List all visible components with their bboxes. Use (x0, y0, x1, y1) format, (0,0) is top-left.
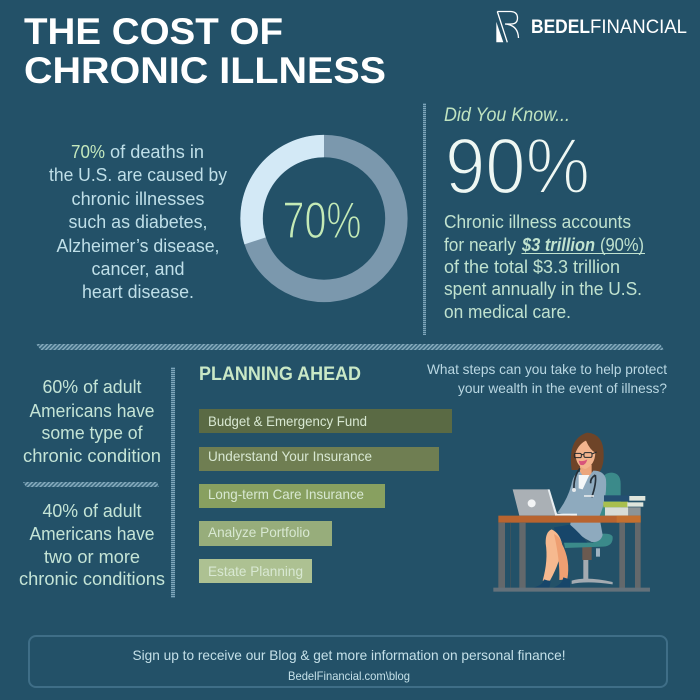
stat: 40% of adults: two or more (44, 547, 140, 567)
title (24, 11, 386, 91)
text block: 70% of deaths: chronic illnesses (72, 189, 204, 209)
heading: did you know: Did You Know... (444, 105, 570, 126)
stat: 60% of adults: some type of (42, 423, 143, 443)
vertical divider: bottom (171, 367, 175, 598)
bar: budget (199, 409, 452, 433)
text block: 70% of deaths (49, 142, 227, 302)
text block: 70% of deaths: Alzheimer’s disease, (56, 236, 220, 256)
big number: 90%: 90% (445, 121, 590, 210)
stat: 40% of adults: Americans have (30, 524, 154, 544)
donut chart: 70%: 70% (282, 192, 362, 250)
bar: estate (199, 559, 312, 583)
stat: 60% of adults (23, 377, 161, 466)
text block: chronic illness accounts: (90%) (600, 235, 644, 255)
logo: Bedel Financial: FINANCIAL (590, 17, 687, 38)
text block: what steps: What steps can you take to help protect (427, 361, 667, 377)
stat: 40% of adults: chronic conditions (19, 569, 165, 589)
horizontal divider: stats (23, 482, 159, 487)
bar: insurance (199, 447, 439, 471)
footer callout (29, 636, 667, 687)
illustration: woman at desk (493, 433, 650, 592)
bar: budget: Budget & Emergency Fund (208, 413, 367, 429)
stat: 60% of adults: Americans have (30, 401, 154, 421)
text block: 70% of deaths: 70% (71, 142, 105, 162)
text block: chronic illness accounts: spent annually in the U.S. (444, 279, 642, 299)
donut chart: 70% (252, 146, 396, 291)
stat: 60% of adults: 60% of adult (42, 377, 142, 397)
bar: insurance: Understand Your Insurance (208, 448, 372, 464)
logo: Bedel Financial: BEDEL (531, 17, 590, 38)
bar: portfolio (199, 521, 332, 546)
text block: chronic illness accounts: for nearly (444, 235, 516, 255)
bar chart: planning steps (199, 409, 452, 583)
text block: 70% of deaths: of deaths in (110, 142, 204, 162)
stat: 60% of adults: chronic condition (23, 446, 161, 466)
footer callout: BedelFinancial.com\blog (288, 669, 410, 683)
text block: 70% of deaths: the U.S. are caused by (49, 165, 227, 185)
stat: 40% of adults: 40% of adult (42, 501, 142, 521)
bar: long-term care: Long-term Care Insurance (208, 486, 364, 502)
bar: long-term care (199, 484, 385, 508)
text block: chronic illness accounts: $3 trillion (521, 235, 595, 255)
text block: what steps (427, 361, 667, 396)
text block: 70% of deaths: cancer, and (92, 259, 184, 279)
text block: 70% of deaths: such as diabetes, (68, 212, 208, 232)
footer callout: Sign up to receive our Blog & get more information on personal finance! (132, 647, 566, 663)
bar: estate: Estate Planning (208, 563, 303, 579)
title: CHRONIC ILLNESS (24, 50, 386, 91)
horizontal divider: main (36, 344, 664, 350)
text block: what steps: your wealth in the event of illness? (458, 380, 667, 396)
bar: portfolio: Analyze Portfolio (208, 524, 310, 540)
heading: planning ahead: PLANNING AHEAD (199, 364, 361, 385)
text block: chronic illness accounts (444, 212, 645, 322)
stat: 40% of adults (19, 501, 165, 589)
title: THE COST OF (24, 11, 283, 52)
text block: chronic illness accounts: on medical care. (444, 302, 571, 322)
text block: 70% of deaths: heart disease. (82, 282, 194, 302)
logo: Bedel Financial (496, 12, 687, 42)
vertical divider: top (423, 103, 426, 335)
text block: chronic illness accounts: of the total $3.3 trillion (444, 257, 620, 277)
text block: chronic illness accounts: Chronic illness accounts (444, 212, 631, 232)
